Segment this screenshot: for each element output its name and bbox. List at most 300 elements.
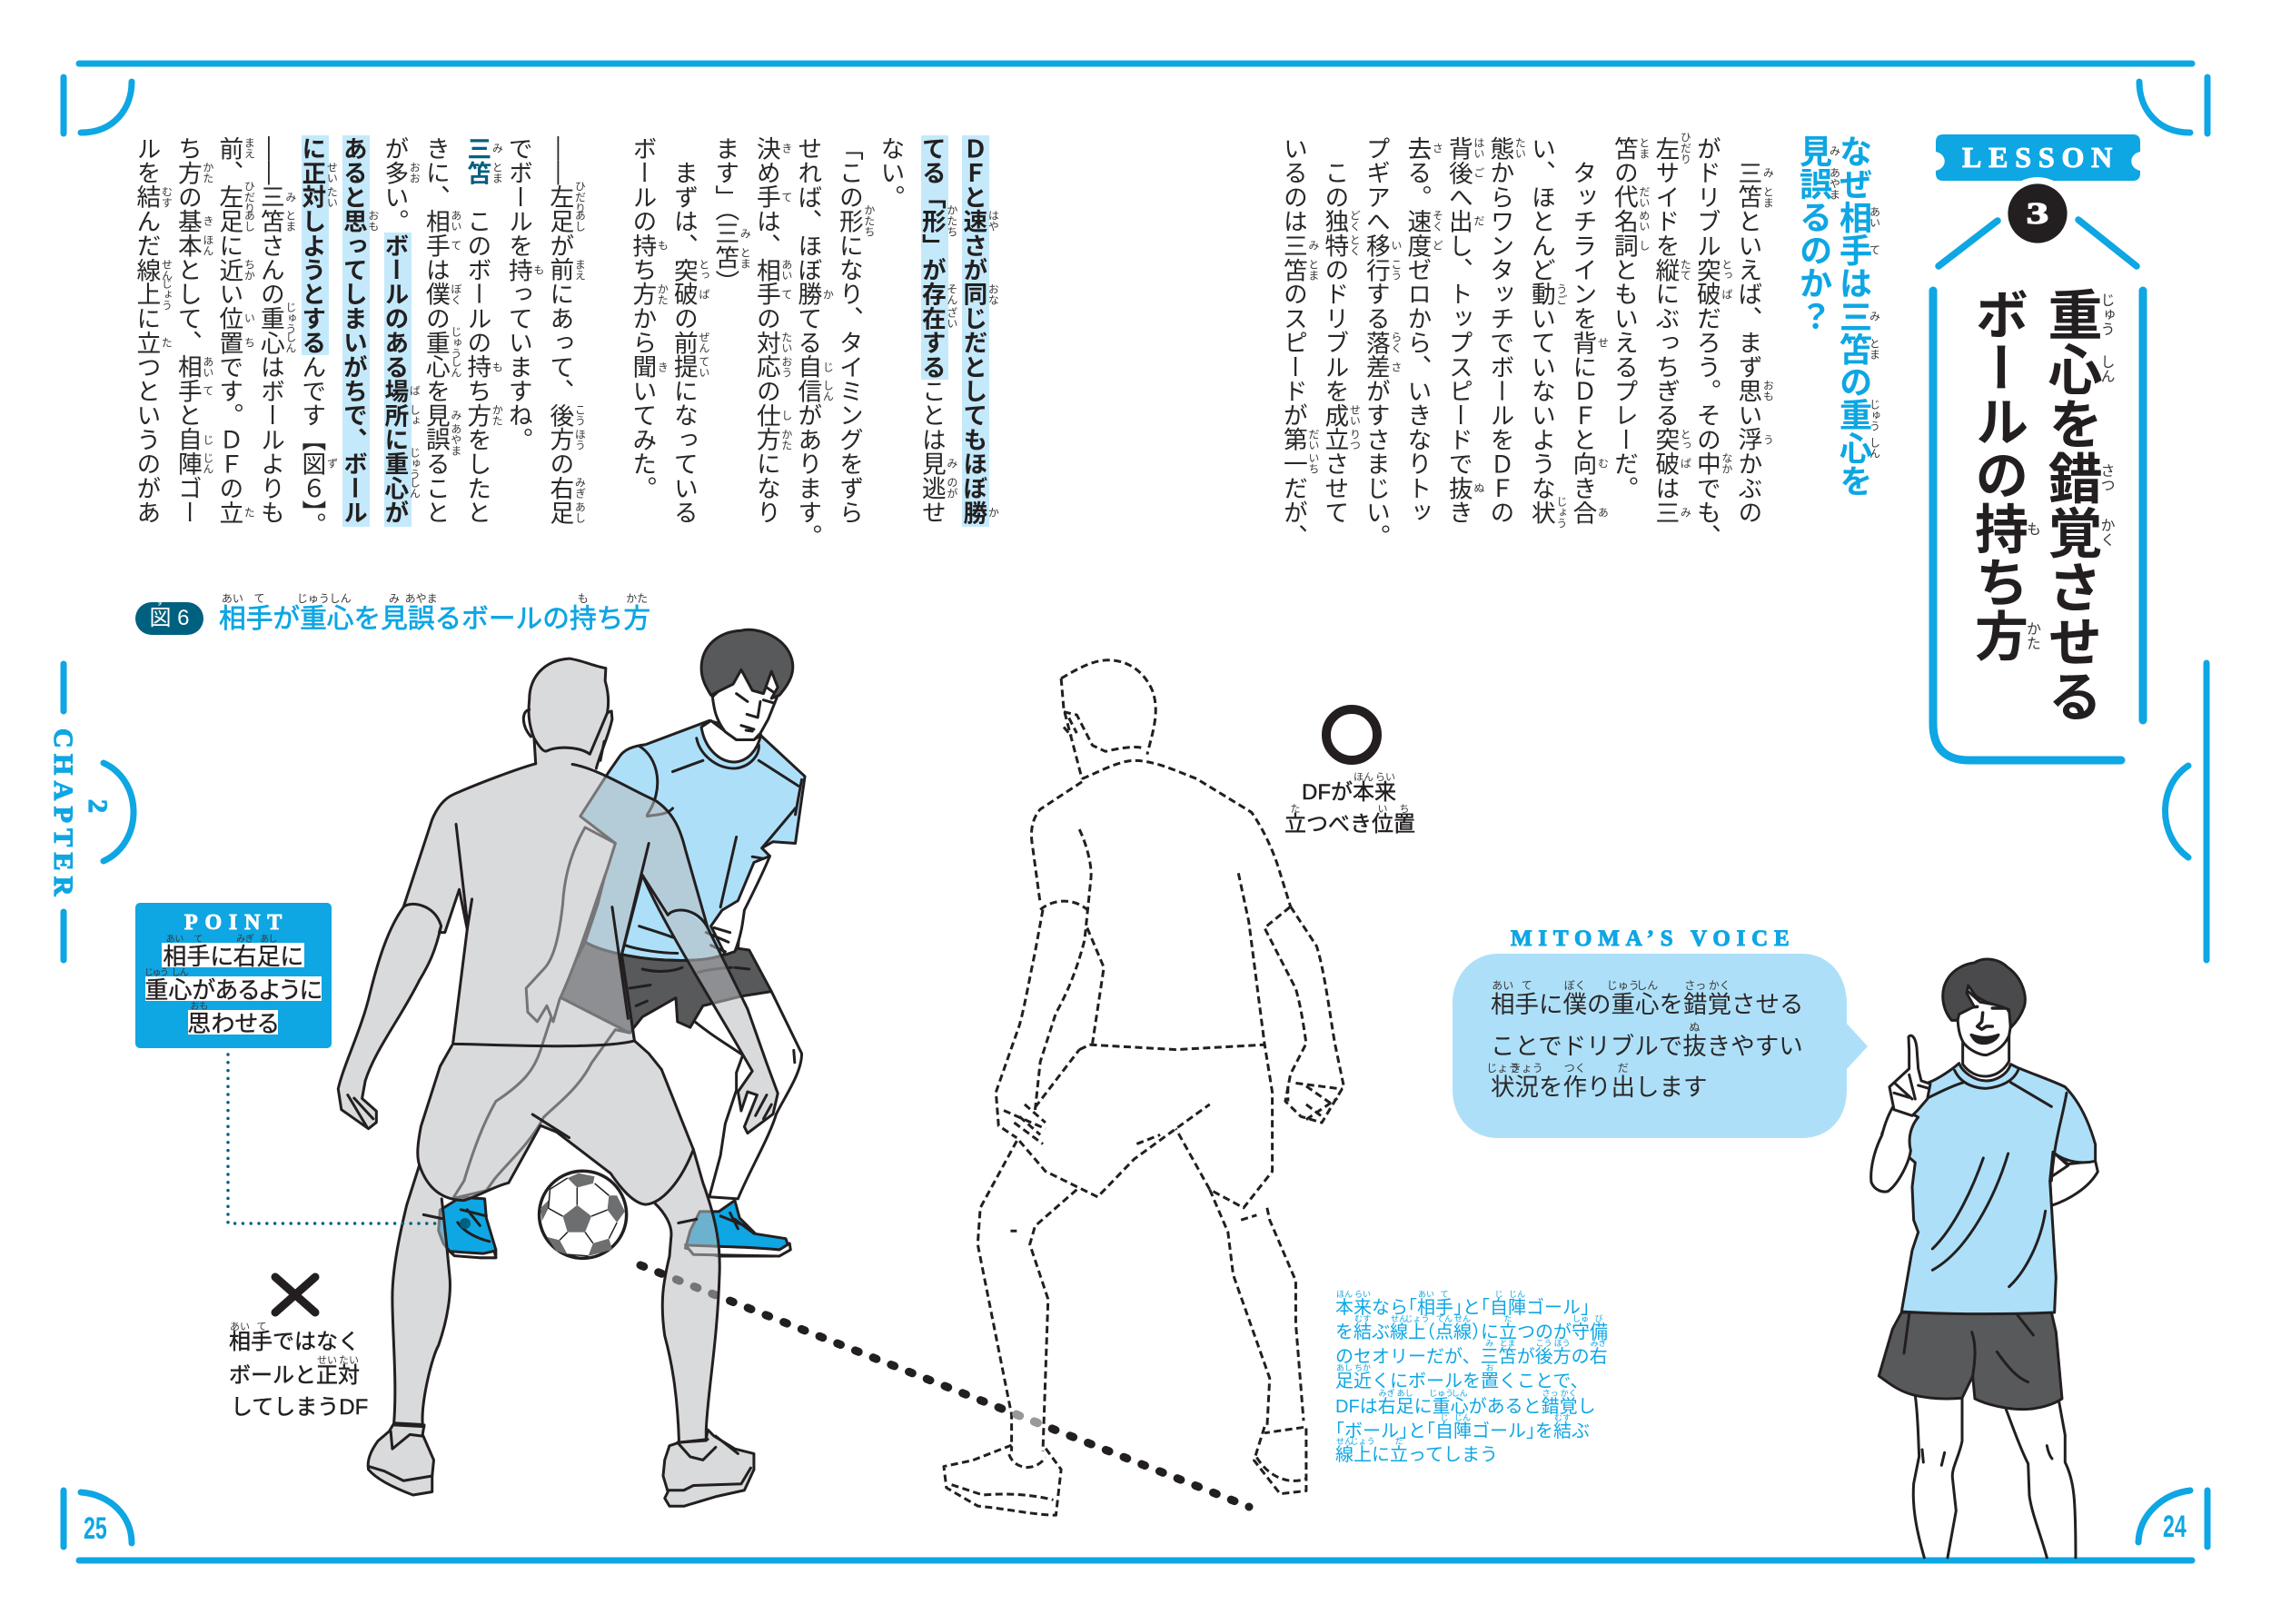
- panel: point: しん: [172, 968, 188, 978]
- illustration: dashed correct-position defender: [944, 660, 1344, 1515]
- body text: left page: か: [987, 507, 999, 518]
- main title: しん: [2098, 354, 2113, 383]
- body text: right page: めい: [1638, 210, 1651, 232]
- lesson badge: [1936, 134, 2140, 266]
- caption: correct position: [1284, 772, 1415, 837]
- panel: point: あい: [166, 935, 183, 945]
- body text: left page: ほう: [573, 429, 586, 451]
- body text: left page: ぜん: [698, 332, 710, 353]
- explanation note: せん: [1391, 1314, 1407, 1323]
- body text: right page: どく: [1348, 210, 1361, 232]
- body text: left page: かたち: [863, 204, 876, 237]
- explanation note: むす: [1554, 1413, 1571, 1422]
- body text: left page: ない。: [877, 136, 904, 209]
- panel: point: [135, 903, 332, 1048]
- panel: point: じゅう: [145, 968, 168, 978]
- body text: left page: も: [491, 361, 503, 372]
- body text: left page: かた: [656, 283, 669, 305]
- explanation note: じ: [1494, 1290, 1503, 1299]
- body text: right page: らく: [1390, 332, 1403, 353]
- body text: right page: 去 る。 速 度 ゼロから、いきなりトッ: [1403, 136, 1431, 524]
- body text: right page: せ: [1596, 337, 1609, 348]
- body text: right page: いるのは 三 笘 のスピードが 第 一 だが、: [1280, 136, 1307, 549]
- explanation note: た: [1394, 1437, 1403, 1446]
- text: み: [389, 592, 400, 605]
- explanation note: こう: [1536, 1339, 1552, 1348]
- caption: correct position: ほん: [1354, 772, 1374, 783]
- explanation note: あし: [1397, 1389, 1413, 1398]
- body text: right page: たて: [1679, 259, 1691, 281]
- body text: left page: たい: [780, 332, 793, 353]
- body text: left page: とま: [284, 210, 297, 232]
- body text: left page: あし: [243, 210, 255, 232]
- voice text: だ: [1618, 1062, 1629, 1074]
- body text: left page: じ: [821, 361, 834, 372]
- body text: left page: ち: [243, 337, 255, 348]
- chapter label: CHAPTER: [48, 728, 78, 902]
- explanation note: みぎ: [1591, 1339, 1607, 1348]
- caption: wrong position: してしまうDF: [231, 1395, 368, 1420]
- subheading line 2: 見 誤 るのか？: [1795, 134, 1832, 332]
- body text: left page: きに、 相 手 は 僕 の 重 心 を 見 誤 ること: [422, 136, 450, 524]
- caption: wrong position: [229, 1321, 368, 1420]
- main title: じゅう: [2098, 292, 2113, 336]
- explanation note: じん: [1454, 1413, 1471, 1422]
- body text: left page: しょ: [408, 404, 421, 426]
- attacker right leg: [687, 992, 802, 1199]
- body text: right page: み: [1307, 240, 1320, 251]
- voice text: じょう: [1486, 1062, 1519, 1074]
- explanation note: ほう: [1554, 1339, 1571, 1348]
- subheading: あい: [1868, 206, 1880, 228]
- body text: left page: とっ: [698, 259, 710, 281]
- body text: left page: みぎ: [573, 477, 586, 499]
- explanation note: せん: [1454, 1314, 1471, 1323]
- body text: left page: ず: [325, 458, 338, 469]
- subheading: て: [1868, 244, 1880, 255]
- body text: right page: いち: [1307, 452, 1320, 474]
- body text: left page: ほん: [202, 234, 214, 256]
- body text: left page: とま: [739, 247, 751, 269]
- body text: right page: がドリブル 突 破 だろう。その 中 でも、: [1693, 136, 1721, 549]
- subheading: あやま: [1828, 167, 1840, 200]
- body text: left page: ひだり: [243, 181, 255, 213]
- voice text: ことでドリブルで抜きやすい: [1491, 1033, 1803, 1060]
- icon: soccer ball: [540, 1171, 627, 1258]
- hair: [1943, 959, 2025, 1028]
- voice text: つく: [1564, 1062, 1586, 1074]
- body text: right page: おも: [1761, 380, 1774, 401]
- explanation note: 足近くにボールを置くことで、: [1335, 1371, 1589, 1391]
- body text: left page: ちか: [243, 259, 255, 281]
- explanation note: じん: [1509, 1290, 1525, 1299]
- body text: right page: ぬ: [1473, 482, 1485, 493]
- explanation note: を結ぶ線上（点線）に立つのが守備: [1335, 1322, 1608, 1342]
- body text: left page: むす: [160, 186, 173, 208]
- explanation note: かく: [1561, 1389, 1577, 1398]
- body text: left page: こう: [573, 404, 586, 426]
- body text: left page: あい: [780, 259, 793, 281]
- attacker shorts: [558, 942, 771, 1033]
- explanation note: せん: [1336, 1437, 1353, 1446]
- explanation note: じゅう: [1429, 1389, 1453, 1398]
- body text: right page: たい: [1513, 137, 1526, 159]
- body text: left page: し: [780, 410, 793, 421]
- explanation note: しゅ: [1572, 1314, 1589, 1323]
- explanation note: DFは右足に重心があると錯覚し: [1335, 1397, 1596, 1417]
- body text: right page: そく: [1431, 210, 1443, 232]
- body text: right page: あ: [1596, 507, 1609, 518]
- voice text: 状況を作り出します: [1491, 1074, 1708, 1101]
- body text: right page: ご: [1473, 167, 1485, 178]
- body text: left page: ぱ: [698, 289, 710, 300]
- body text: left page: のが: [946, 477, 958, 499]
- body text: left page: も: [656, 240, 669, 251]
- body text: left page: おお: [408, 162, 421, 183]
- voice text: じゅう: [1607, 979, 1640, 992]
- explanation note: 「ボール」と「自陣ゴール」を結ぶ: [1335, 1421, 1590, 1441]
- explanation note: あし: [1336, 1363, 1353, 1372]
- caption: wrong position: たい: [339, 1355, 359, 1366]
- body text: left page: て: [450, 240, 462, 251]
- body text: left page: でボールを 持 っていますね。: [505, 136, 532, 451]
- body text: right page: ぱ: [1679, 458, 1691, 469]
- body text: left page: はや: [987, 210, 999, 232]
- body text: left page: じゅう: [450, 326, 462, 359]
- body text: right page: ひだり: [1679, 132, 1691, 164]
- subheading: み: [1868, 311, 1880, 322]
- point line 2: 重心があるように: [144, 976, 322, 1004]
- voice text: さっ: [1684, 979, 1706, 992]
- illustration: defender outlines: [338, 659, 778, 1506]
- attacker left arm: [526, 827, 615, 1022]
- shirt: [1882, 1064, 2096, 1314]
- text: も: [578, 592, 589, 605]
- attacker neck: [701, 720, 761, 762]
- body text: right page: とく: [1348, 234, 1361, 256]
- caption: correct position: た: [1290, 803, 1301, 814]
- voice text: きょう: [1511, 1062, 1543, 1074]
- panel: point: あし: [260, 935, 277, 945]
- body text: left page: ルを 結 んだ 線 上 に 立 つというのがあ: [133, 136, 160, 524]
- body text: left page: み: [491, 143, 503, 153]
- face: [1958, 990, 2012, 1055]
- body text: right page: プギアへ 移 行 する 落 差 がすさまじい。: [1363, 136, 1390, 549]
- body text: right page: だ: [1473, 215, 1485, 226]
- subheading line 1: なぜ 相 手 は 三 笘 の 重 心 を: [1835, 134, 1872, 497]
- body text: left page: かたち: [946, 204, 958, 237]
- explanation note: お: [1485, 1363, 1494, 1372]
- explanation note: み: [1485, 1339, 1493, 1348]
- caption: correct position: らい: [1375, 772, 1395, 783]
- body text: right page: 背 後 へ 出 し、トップスピードで 抜 き: [1445, 136, 1473, 524]
- caption: correct position: い: [1377, 803, 1388, 814]
- back arm: [2050, 1152, 2097, 1205]
- body text: left page: に 正 対 しようとする んです【 図 ６】。: [298, 136, 325, 537]
- text: て: [254, 592, 265, 605]
- explanation note: みぎ: [1379, 1389, 1395, 1398]
- body text: left page: [133, 135, 999, 549]
- shorts: [1879, 1312, 2062, 1410]
- legs: [1913, 1396, 2076, 1558]
- body text: left page: あい: [202, 356, 214, 378]
- icon: cross mark: [275, 1277, 315, 1312]
- body text: left page: しん: [284, 332, 297, 353]
- voice text: ぬ: [1689, 1021, 1700, 1034]
- panel: point: みぎ: [236, 935, 253, 945]
- caption: wrong position: 相手ではなく: [229, 1330, 360, 1354]
- voice bubble: [1453, 954, 1868, 1138]
- explanation note: あい: [1418, 1290, 1434, 1299]
- body text: left page: おう: [780, 356, 793, 378]
- explanation note: じょう: [1350, 1437, 1375, 1446]
- body text: left page: 前 、 左 足 に 近 い 位 置 です。ＤＦの 立: [215, 136, 243, 524]
- voice heading: MITOMA’S VOICE: [1511, 926, 1795, 951]
- body text: left page: たい: [325, 186, 338, 208]
- body text: left page: じゅう: [408, 447, 421, 480]
- lesson number: 3: [2027, 197, 2048, 231]
- figure heading: 相手が重心を見誤るボールの持ち方: [219, 604, 650, 634]
- body text: left page: た: [243, 507, 255, 518]
- title frame: [1933, 291, 2143, 760]
- explanation note: ちか: [1354, 1363, 1371, 1372]
- explanation note: 線上に立ってしまう: [1335, 1445, 1498, 1465]
- explanation note: とま: [1500, 1339, 1516, 1348]
- body text: left page: ―― 左 足 が 前 にあって、 後 方 の 右 足: [546, 136, 573, 524]
- body text: right page: だい: [1638, 186, 1651, 208]
- body text: left page: じ: [202, 434, 214, 445]
- explanation note: び: [1594, 1314, 1603, 1323]
- body text: right page: 左 サイドを 縦 にぶっちぎる 突 破 は 三: [1651, 136, 1679, 524]
- body text: left page: じん: [202, 452, 214, 474]
- body text: left page: ば: [408, 385, 421, 396]
- body text: left page: せれば、ほぼ 勝 てる 自 信 があります。: [794, 136, 821, 549]
- subheading: み: [1828, 145, 1840, 156]
- body text: right page: うご: [1555, 283, 1568, 305]
- main title: かく: [2098, 518, 2113, 547]
- chapter number: 2: [83, 799, 113, 813]
- body text: left page: あし: [573, 210, 586, 232]
- subheading: [1795, 134, 1880, 497]
- caption: correct position: DFが本来: [1302, 780, 1396, 805]
- body text: left page: ＤＦと 速 さが 同 じだとしてもほぼ 勝: [959, 136, 987, 524]
- body text: left page: せん: [160, 259, 173, 281]
- main title: も: [2024, 521, 2039, 536]
- explanation note: むす: [1354, 1314, 1371, 1323]
- attacker hair: [701, 629, 793, 698]
- voice text: あい: [1492, 979, 1513, 992]
- body text: left page: ひだり: [573, 181, 586, 213]
- figure label: 図 6: [149, 606, 189, 630]
- voice text: て: [1522, 979, 1532, 992]
- illustration: attacker behind defender: [439, 629, 805, 1258]
- subheading: とま: [1868, 338, 1880, 360]
- explanation note: しん: [1452, 1389, 1468, 1398]
- body text: right page: み: [1761, 167, 1774, 178]
- explanation note: じ: [1440, 1413, 1449, 1422]
- body text: left page: あし: [573, 501, 586, 523]
- body text: left page: み: [284, 192, 297, 203]
- body text: left page: き: [780, 143, 793, 153]
- caption: wrong position: せい: [317, 1355, 337, 1366]
- body text: left page: あい: [450, 210, 462, 232]
- body text: left page: き: [656, 361, 669, 372]
- voice text: かく: [1709, 979, 1731, 992]
- title line 2: ボールの 持 ち 方: [1967, 287, 2027, 662]
- body text: right page: 態 からワンタッチでボールをＤＦの: [1486, 136, 1513, 524]
- body text: left page: ます」 （ 三 笘 ）: [711, 136, 739, 282]
- body text: left page: しん: [450, 356, 462, 378]
- body text: left page: そん: [946, 283, 958, 305]
- point line 1: 相手に右足に: [163, 943, 303, 970]
- body text: left page: ぼく: [450, 283, 462, 305]
- body text: right page: 笘 の 代 名 詞 ともいえるプレーだ。: [1611, 136, 1638, 500]
- caption: wrong position: あい: [230, 1321, 250, 1332]
- voice text: ぼく: [1564, 979, 1586, 992]
- attacker right shoe: [686, 1201, 789, 1256]
- body text: left page: が 多 い。 ボールのある 場 所 に 重 心 が: [381, 136, 408, 524]
- body text: right page: とま: [1638, 137, 1651, 159]
- body text: left page: まえ: [573, 259, 586, 281]
- body text: left page: て: [202, 385, 214, 396]
- attacker shirt: [580, 720, 805, 961]
- subheading: じゅう: [1868, 399, 1880, 431]
- explanation note: じょう: [1404, 1314, 1430, 1323]
- body text: right page: さ: [1431, 143, 1443, 153]
- text: しん: [330, 592, 352, 605]
- figure 6 pill: [135, 602, 203, 635]
- subheading: しん: [1868, 437, 1880, 459]
- body text: left page: 三 笘 このボールの 持 ち 方 をしたと: [463, 136, 491, 524]
- body text: left page: て: [780, 289, 793, 300]
- body text: right page: 三 笘 といえば、まず 思 い 浮 かぶの: [1734, 161, 1761, 524]
- page number 24: 24: [2163, 1510, 2187, 1544]
- body text: right page: とま: [1307, 259, 1320, 281]
- illustration: Mitoma pointing: [1871, 959, 2097, 1558]
- explanation note: のセオリーだが、三笘が後方の右: [1335, 1347, 1608, 1367]
- raised forearm: [1871, 1105, 1919, 1192]
- body text: left page: み: [946, 458, 958, 469]
- body text: right page: この 独 特 のドリブルを 成 立 させて: [1321, 161, 1348, 524]
- body text: right page: とっ: [1721, 259, 1733, 281]
- explanation note: らい: [1354, 1290, 1371, 1299]
- dashed line section seen through figure: [1012, 1410, 1042, 1428]
- explanation note: て: [1440, 1290, 1449, 1299]
- body text: left page: とま: [491, 162, 503, 183]
- caption: wrong position: て: [256, 1321, 267, 1332]
- attacker left shoe: [439, 1197, 496, 1258]
- body text: right page: りつ: [1348, 429, 1361, 451]
- page number 25: 25: [84, 1511, 107, 1546]
- body text: left page: た: [160, 337, 173, 348]
- body text: right page: はい: [1473, 137, 1485, 159]
- body text: left page: せい: [325, 162, 338, 183]
- text: じゅう: [297, 592, 330, 605]
- text: かた: [626, 592, 648, 605]
- neck: [1963, 1035, 2009, 1076]
- body text: left page: 「この 形 になり、タイミングをずら: [836, 136, 863, 524]
- body text: left page: かた: [780, 429, 793, 451]
- body text: left page: じゅう: [284, 302, 297, 334]
- text: あい: [222, 592, 243, 605]
- explanation note: 本来なら「相手」と「自陣ゴール」: [1335, 1298, 1590, 1318]
- dotted leader from point box: [228, 1055, 471, 1229]
- lesson label: LESSON: [1962, 141, 2119, 173]
- text: ず: [155, 598, 164, 607]
- attacker right arm and hand: [711, 857, 769, 955]
- body text: left page: あやま: [450, 423, 462, 456]
- body text: left page: 決 め 手 は、 相 手 の 対 応 の 仕 方 になり: [753, 136, 780, 524]
- body text: left page: あると 思 ってしまいがちで、ボール: [340, 136, 367, 524]
- illustration: gray defender silhouette: [338, 659, 778, 1506]
- body text: left page: て: [780, 192, 793, 203]
- caption: correct position: 立つべき位置: [1284, 812, 1415, 837]
- voice text: [1486, 979, 1804, 1101]
- body text: right page: う: [1761, 434, 1774, 445]
- title line 1: 重 心 を 錯 覚 させる: [2040, 287, 2101, 723]
- body text: right page: み: [1679, 507, 1691, 518]
- body text: left page: じょう: [160, 278, 173, 311]
- body text: left page: おも: [367, 210, 380, 232]
- main title: さつ: [2098, 463, 2113, 492]
- explanation note: さっ: [1542, 1389, 1559, 1398]
- main title: かた: [2024, 621, 2039, 650]
- body text: left page: ―― 三 笘 さんの 重 心 はボールよりも: [257, 136, 284, 524]
- explanation note: てん: [1436, 1314, 1453, 1323]
- body text: left page: ち 方 の 基 本 として、 相 手 と 自 陣 ゴー: [174, 136, 202, 524]
- body text: right page: じょう: [1555, 496, 1568, 529]
- caption: wrong position: ボールと正対: [229, 1363, 360, 1388]
- body text: right page: とっ: [1679, 429, 1691, 451]
- body text: left page: てる「 形 」が 存 在 する ことは 見 逃 せ: [918, 136, 946, 524]
- panel: point: て: [194, 935, 203, 945]
- body text: right page: し: [1638, 240, 1651, 251]
- body text: right page: い: [1390, 240, 1403, 251]
- panel: point: おも: [191, 1002, 208, 1012]
- voice text: 相手に僕の重心を錯覚させる: [1491, 991, 1804, 1018]
- body text: left page: き: [202, 215, 214, 226]
- explanation note: ほん: [1336, 1290, 1353, 1299]
- body text: right page: さ: [1390, 361, 1403, 372]
- attacker face: [712, 669, 778, 739]
- body text: left page: も: [532, 264, 545, 275]
- body text: right page: い、ほとんど 動 いていないような 状: [1528, 136, 1555, 524]
- point line 3: 思わせる: [187, 1010, 279, 1037]
- body text: right page: だい: [1307, 429, 1320, 451]
- body text: left page: み: [739, 228, 751, 239]
- body text: left page: まえ: [243, 137, 255, 159]
- body text: right page: こう: [1390, 259, 1403, 281]
- body text: right page: とま: [1761, 186, 1774, 208]
- body text: left page: み: [450, 410, 462, 421]
- body text: left page: か: [821, 289, 834, 300]
- body text: left page: てい: [698, 356, 710, 378]
- body text: right page: [1280, 132, 1774, 549]
- body text: left page: しん: [821, 380, 834, 401]
- text: あやま: [405, 592, 438, 605]
- body text: left page: ボールの 持 ち 方 から 聞 いてみた。: [629, 136, 656, 500]
- body text: left page: ざい: [946, 307, 958, 329]
- icon: circle mark: [1326, 709, 1377, 760]
- body text: right page: タッチラインを 背 にＤＦと 向 き 合: [1569, 161, 1596, 524]
- body text: right page: む: [1596, 458, 1609, 469]
- body text: left page: かた: [202, 162, 214, 183]
- dashed line between ball and goal: [640, 1265, 1249, 1507]
- body text: right page: なか: [1721, 452, 1733, 474]
- body text: left page: しん: [408, 477, 421, 499]
- body text: left page: まずは、 突 破 の 前 提 になっている: [670, 161, 698, 524]
- body text: left page: おな: [987, 283, 999, 305]
